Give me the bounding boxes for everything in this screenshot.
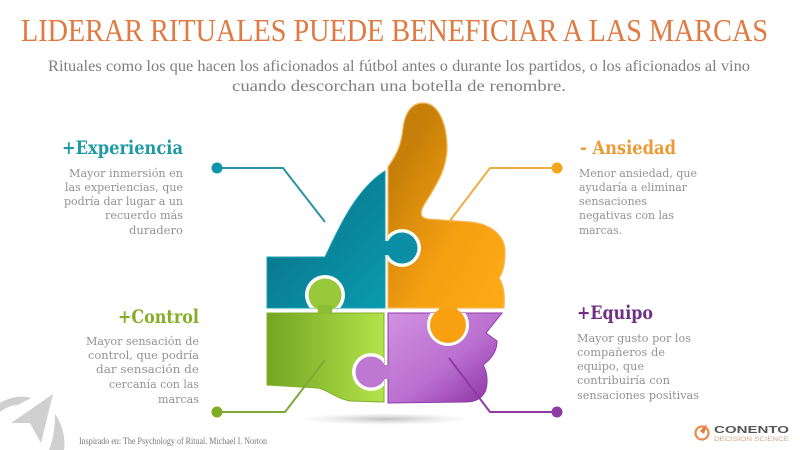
- subtitle: [48, 58, 750, 95]
- subtitle: cuando descorchan una botella de renombre.: [232, 78, 566, 95]
- block: equipo: Mayor gusto por los: [577, 331, 691, 345]
- block: equipo: sensaciones positivas: [577, 388, 699, 402]
- watermark logo: [0, 394, 65, 450]
- block: experiencia: recuerdo más: [105, 208, 183, 222]
- connector line: experiencia: [212, 162, 325, 222]
- block: equipo: compañeros de: [577, 345, 665, 359]
- connector line: control: [212, 360, 325, 418]
- source note: Inspirado en: The Psychology of Ritual. Michael I. Norton: [79, 436, 267, 446]
- block: experiencia: [62, 137, 184, 237]
- block: ansiedad: marcas.: [579, 223, 622, 237]
- thumbs-up puzzle graphic: [267, 103, 505, 425]
- block: ansiedad: [579, 137, 697, 237]
- block: experiencia: +Experiencia: [62, 137, 183, 159]
- connector line: equipo: [449, 358, 562, 418]
- block: ansiedad: Menor ansiedad, que: [579, 166, 697, 180]
- puzzle shadow: [300, 413, 470, 425]
- subtitle: Rituales como los que hacen los aficionados al fútbol antes o durante los partidos, o los aficionados al vino: [48, 58, 750, 75]
- block: ansiedad: sensaciones: [579, 194, 647, 208]
- block: experiencia: duradero: [129, 223, 183, 237]
- block: equipo: contribuiría con: [577, 373, 671, 387]
- puzzle piece: purple: [388, 313, 502, 403]
- puzzle piece: green: [267, 313, 384, 402]
- block: equipo: +Equipo: [577, 302, 653, 324]
- connector knob: green: [305, 275, 345, 315]
- block: experiencia: podría dar lugar a un: [64, 194, 184, 208]
- block: equipo: [577, 302, 699, 402]
- logo: conento: CONENTO: [714, 424, 789, 436]
- block: control: dar sensación de: [96, 362, 199, 376]
- block: experiencia: las experiencias, que: [65, 180, 183, 194]
- block: experiencia: Mayor inmersión en: [69, 166, 184, 180]
- puzzle piece: teal: [267, 171, 385, 308]
- connector knob: purple: [352, 353, 390, 391]
- block: control: [86, 306, 199, 406]
- logo: conento: [696, 424, 789, 443]
- block: equipo: equipo, que: [577, 359, 644, 373]
- connector line: ansiedad: [449, 162, 562, 222]
- block: ansiedad: ayudaría a eliminar: [579, 180, 687, 194]
- connector knob: teal: [383, 229, 421, 267]
- block: ansiedad: negativas con las: [579, 208, 674, 222]
- block: control: marcas: [158, 392, 199, 406]
- block: control: Mayor sensación de: [86, 334, 199, 348]
- logo: conento: DECISION SCIENCE: [714, 437, 789, 443]
- block: ansiedad: - Ansiedad: [580, 137, 676, 159]
- connector knob: orange: [427, 304, 469, 346]
- block: control: +Control: [118, 306, 199, 328]
- block: control: control, que podría: [88, 348, 199, 362]
- block: control: cercanía con las: [109, 377, 199, 391]
- puzzle piece: orange: [388, 103, 505, 308]
